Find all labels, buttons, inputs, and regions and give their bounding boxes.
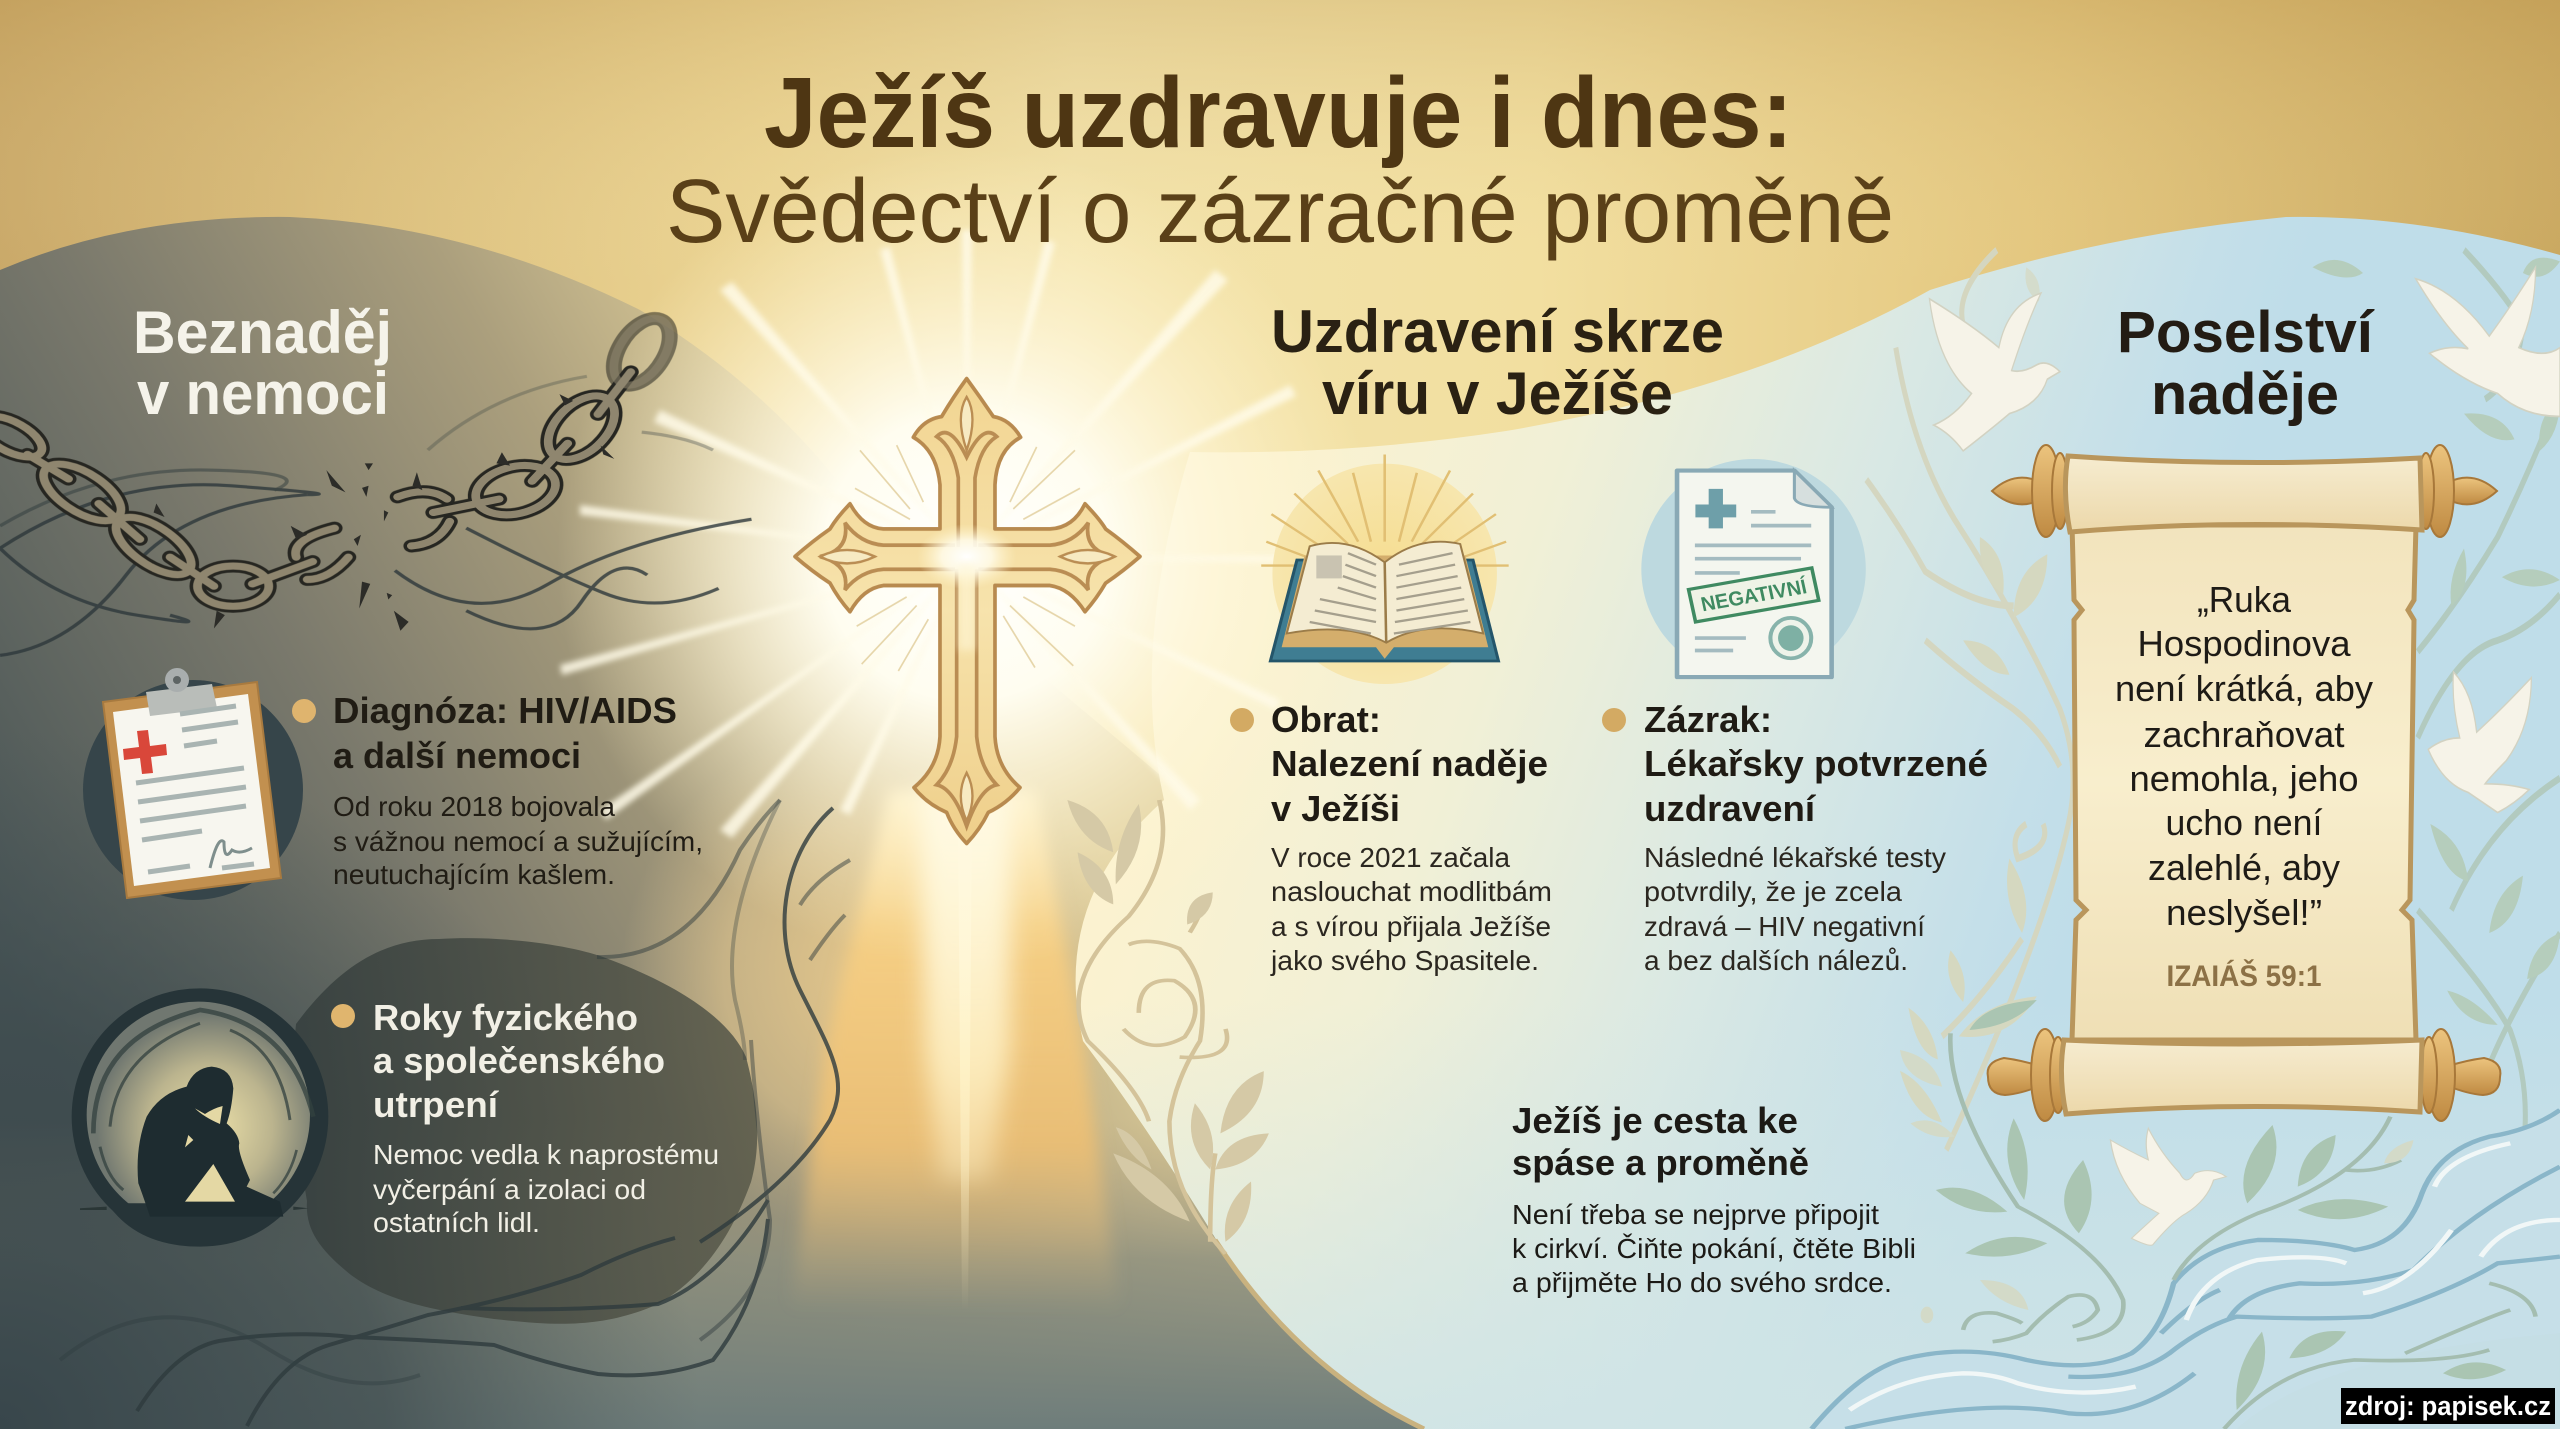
text block: Jesus is the way: Není třeba se nejprve připojit: [1512, 1199, 1879, 1230]
icon: negative test document: NEGATIVNÍ: [1699, 574, 1810, 616]
text block: suffering: Nemoc vedla k naprostému: [373, 1139, 719, 1170]
decorative thorn vines behind chain: [0, 376, 751, 655]
dove: lower centre: [2110, 1128, 2226, 1245]
decorative upper vines and leaves on the right: [1866, 250, 2560, 1150]
panel: dark despair area background: [0, 217, 1424, 1429]
decorative vines lower centre left: [60, 800, 850, 1426]
text block: diagnosis: Diagnóza: HIV/AIDS: [333, 690, 677, 731]
source label: zdroj: papisek.cz: [2345, 1391, 2551, 1421]
panel: dark blob behind suffering text: [294, 938, 757, 1324]
text block: turning point: Obrat:: [1271, 699, 1381, 740]
text block: diagnosis: Od roku 2018 bojovala: [333, 791, 615, 822]
bullet: suffering: [331, 1004, 355, 1028]
text block: Jesus is the way: [1512, 1100, 1916, 1298]
heading: Beznaděj v nemoci: Beznaděj: [133, 299, 392, 366]
heading: Uzdravení skrze víru v Ježíše: [1271, 298, 1724, 427]
text block: miracle: Lékařsky potvrzené: [1644, 743, 1988, 784]
panel: light blue hope area background: [1076, 217, 2560, 1429]
icon: golden cross: [795, 379, 1140, 843]
icon: negative test document: [1641, 459, 1866, 679]
heading: Beznaděj v nemoci: v nemoci: [137, 360, 389, 427]
heading: Beznaděj v nemoci: [133, 299, 392, 427]
icon: doves: [1929, 267, 2560, 1245]
text block: Isaiah quote: Hospodinova: [2138, 623, 2351, 664]
text block: turning point: jako svého Spasitele.: [1270, 945, 1539, 976]
heading: Poselství naděje: [2117, 300, 2375, 427]
icon: medical clipboard: [83, 668, 303, 900]
text block: suffering: vyčerpání a izolaci od: [373, 1174, 646, 1205]
text block: Isaiah quote: nemohla, jeho: [2130, 758, 2358, 799]
text block: miracle: a bez dalších nálezů.: [1644, 945, 1908, 976]
text block: Jesus is the way: Ježíš je cesta ke: [1512, 1100, 1798, 1141]
text block: Jesus is the way: a přijměte Ho do svého srdce.: [1512, 1267, 1892, 1298]
title: Ježíš uzdravuje i dnes:: [764, 57, 1793, 169]
text block: suffering: a společenského: [373, 1040, 665, 1081]
text block: miracle: zdravá – HIV negativní: [1644, 911, 1925, 942]
text block: miracle: uzdravení: [1644, 788, 1816, 829]
title: [666, 57, 1894, 262]
text block: turning point: naslouchat modlitbám: [1271, 876, 1552, 907]
dove: upper right: [2416, 267, 2560, 416]
text block: miracle: Zázrak:: [1644, 699, 1772, 740]
icon: broken chain: [0, 311, 681, 631]
text block: turning point: V roce 2021 začala: [1271, 842, 1510, 873]
text block: suffering: Roky fyzického: [373, 997, 638, 1038]
text block: Jesus is the way: k cirkví. Čiňte pokání, čtěte Bibli: [1512, 1233, 1916, 1264]
text block: turning point: v Ježíši: [1271, 788, 1400, 829]
text block: suffering: ostatních lidl.: [373, 1207, 540, 1238]
text block: diagnosis: a další nemoci: [333, 735, 581, 776]
radial glow and sun rays: [557, 147, 1400, 967]
text block: Isaiah quote: zachraňovat: [2144, 714, 2344, 755]
panel: parchment scroll: [1988, 445, 2500, 1121]
decorative swirl and leaves near centre: [1067, 800, 1269, 1254]
water waves and lower vines: [1812, 1000, 2560, 1429]
bullet: diagnosis: [292, 699, 316, 723]
text block: Isaiah quote: [2115, 579, 2373, 993]
text block: diagnosis: [333, 690, 703, 890]
heading: Uzdravení skrze víru v Ježíše: víru v Ježíše: [1322, 360, 1673, 427]
text block: miracle: Následné lékařské testy: [1644, 842, 1946, 873]
text block: Isaiah quote: ucho není: [2166, 802, 2322, 843]
heading: Poselství naděje: naděje: [2151, 362, 2339, 427]
bullet: turning point: [1230, 708, 1254, 732]
text block: suffering: utrpení: [373, 1084, 499, 1125]
title: Svědectví o zázračné proměně: [666, 162, 1894, 262]
dove: upper left: [1929, 293, 2060, 451]
text block: Isaiah quote: neslyšel!”: [2166, 892, 2322, 933]
heading: Poselství naděje: Poselství: [2117, 300, 2375, 365]
bullet: miracle: [1602, 708, 1626, 732]
text block: Isaiah quote: „Ruka: [2197, 579, 2292, 620]
text block: turning point: Nalezení naděje: [1271, 743, 1548, 784]
text block: Isaiah quote: zalehlé, aby: [2148, 847, 2340, 888]
light beam below cross: [790, 790, 1120, 1310]
text block: diagnosis: s vážnou nemocí a sužujícím,: [333, 826, 703, 857]
icon: open Bible with halo: [1261, 454, 1509, 684]
text block: Isaiah quote: IZAIÁŠ 59:1: [2166, 959, 2322, 993]
text block: miracle: [1644, 699, 1988, 976]
text block: turning point: [1270, 699, 1552, 976]
text block: miracle: potvrdily, že je zcela: [1644, 876, 1902, 907]
icon: figure in sorrow: [72, 988, 328, 1247]
text block: Isaiah quote: není krátká, aby: [2115, 668, 2373, 709]
text block: turning point: a s vírou přijala Ježíše: [1271, 911, 1551, 942]
text block: diagnosis: neutuchajícím kašlem.: [333, 859, 615, 890]
dove: middle right: [2428, 672, 2531, 813]
text block: suffering: [373, 997, 719, 1238]
text block: Jesus is the way: spáse a proměně: [1512, 1142, 1809, 1183]
heading: Uzdravení skrze víru v Ježíše: Uzdravení skrze: [1271, 298, 1724, 365]
